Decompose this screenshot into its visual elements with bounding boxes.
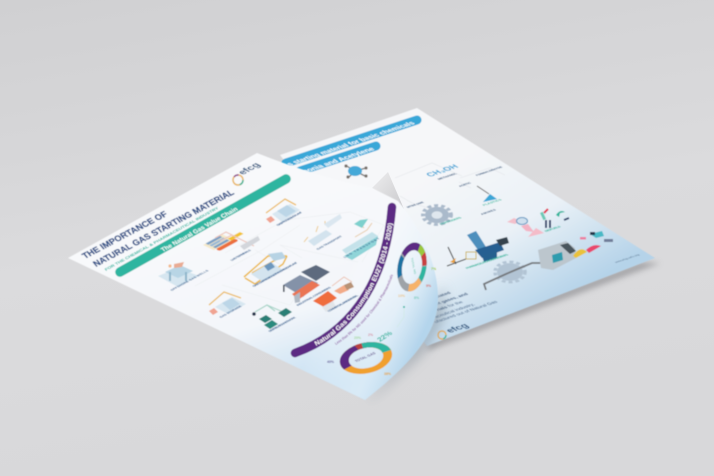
percentage labels: 9% xyxy=(426,284,432,288)
icon: methane molecule xyxy=(344,164,368,179)
text block: footer statement: rials for the xyxy=(435,300,465,312)
icon: commercial market xyxy=(313,277,354,312)
label: CH3OH methanol: METHANOL xyxy=(437,172,458,181)
icon: gas processing plant xyxy=(266,199,300,223)
heading band: value chain: The Natural Gas Value Chain xyxy=(160,206,239,253)
donut centre label: TOTAL NG xyxy=(410,257,417,275)
heading band: value chain xyxy=(120,179,286,272)
label: formaldehyde: FORMALDEHYDE xyxy=(475,166,503,177)
logo: efcg back sheet: efcg xyxy=(443,322,472,335)
icon: ship xyxy=(342,219,378,260)
label: robot category: PHARMACEUTICAL INGREDIENTS xyxy=(465,253,510,270)
callout: 22 percent: 22% xyxy=(375,329,395,343)
label: gas processing plant: GAS PROCESSING PLANT xyxy=(275,211,303,226)
icon: gear pipeline machine xyxy=(484,231,613,290)
percentage labels: 40% xyxy=(327,360,335,364)
icon: gear fertilisers xyxy=(423,205,451,225)
donut chart: total consumption xyxy=(342,341,390,375)
donut chart: total consumption: TOTAL GAS xyxy=(354,351,377,363)
footer url: www.efcg.cefic.org xyxy=(614,253,641,264)
label: offshore rig: OFFSHORE GAS WELLS xyxy=(169,269,210,291)
percentage labels: 38% xyxy=(384,372,392,376)
heading band: basic chemicals: monia and Acetylene xyxy=(297,146,377,175)
label: LNG plant: LNG TERMINALS xyxy=(229,249,252,261)
icon: pale pipeline xyxy=(304,214,342,246)
label: fuel labels: MTBE DME xyxy=(406,201,425,209)
panel: back sheet xyxy=(280,108,655,346)
tree connector lines xyxy=(395,163,505,210)
icon: industrial buildings xyxy=(283,265,330,303)
icon: offshore rig xyxy=(158,262,199,287)
panel: front sheet xyxy=(68,153,438,400)
icon: LNG plant xyxy=(203,229,260,252)
label: pharma: BIOFUELS xyxy=(544,225,563,233)
shadow of curled sheet xyxy=(365,285,444,405)
icon: gas transmission xyxy=(244,252,287,284)
subheading: less than 5 percent: Less than 5% for NG used for Chemical & Pharmaceuticals xyxy=(334,274,394,346)
back sheet shadow xyxy=(427,262,660,351)
text block: footer statement: aceutical industry, xyxy=(433,303,477,319)
logo: efcg: efcg xyxy=(236,162,264,176)
subtitle: FOR THE CHEMICAL & PHARMACEUTICAL INDUSTRY xyxy=(104,206,220,272)
panel: curled corner underside xyxy=(372,172,404,209)
label: funnel category: PLASTICS xyxy=(482,198,504,207)
heading band: consumption: Natural Gas Consumption EU27 (2014 - 2020) xyxy=(314,222,394,346)
icon: distribution xyxy=(252,305,292,329)
logo: efcg back sheet xyxy=(438,322,472,339)
label: distribution: DISTRIBUTION NETWORK xyxy=(267,316,298,332)
label: pale pipeline: GAS TRANSPORT xyxy=(315,235,343,250)
label: ship: LNG TRANSPORT xyxy=(342,237,381,258)
percentage labels: 20% xyxy=(354,336,362,340)
label: gas transmission: GAS COMPRESSION & TRANSMISSION PLANT xyxy=(251,261,299,287)
donut chart: NG for chemicals xyxy=(396,244,428,290)
title: NATURAL GAS STARTING MATERIAL xyxy=(91,188,236,268)
percentage labels: 10% xyxy=(398,294,406,298)
icon: robot arm and lab xyxy=(447,231,509,266)
text block: footer statement: ciated xyxy=(434,291,453,299)
percentage labels: 8% xyxy=(414,296,420,300)
logo: efcg xyxy=(233,162,264,185)
percentage labels xyxy=(327,267,437,376)
divider frames xyxy=(195,212,384,305)
percentage labels: 2% xyxy=(368,333,374,337)
title: THE IMPORTANCE OF xyxy=(80,209,170,260)
label: amines: AMINES xyxy=(480,208,498,216)
icon: pharma DNA and people xyxy=(507,209,569,237)
label: gear category: FERTILISERS xyxy=(439,216,463,226)
icon: gas storage xyxy=(209,292,246,315)
label: CH3OH methanol: CH₃OH xyxy=(423,163,461,178)
label: gas storage: GAS STORAGE xyxy=(218,305,243,318)
heading band: consumption xyxy=(290,202,397,358)
text block: footer statement: nt gases, and xyxy=(434,292,470,306)
label: commercial: COMMERCIAL & RESIDENTIAL xyxy=(326,294,360,312)
percentage labels: 7% xyxy=(431,267,437,271)
callout: 22 percent xyxy=(375,306,405,343)
icon: funnel xyxy=(477,186,497,202)
text block: footer statement: ufactured out of Natural Gas xyxy=(433,300,500,324)
label: industrial: INDUSTRIAL CONSUMERS xyxy=(295,286,332,306)
label: acetic acid: ACETIC xyxy=(458,181,473,188)
heading band: basic chemicals: s starting material for basic chemicals xyxy=(284,120,417,167)
